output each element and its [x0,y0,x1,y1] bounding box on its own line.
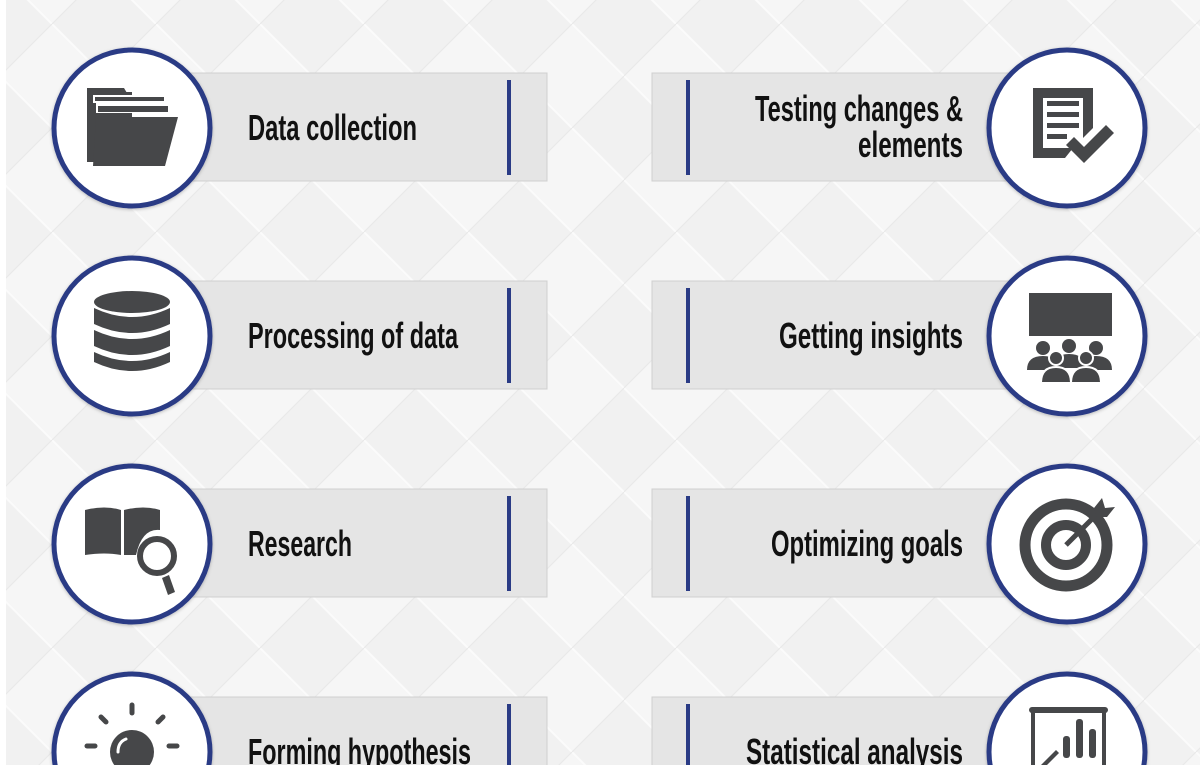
icon: folder [87,88,178,166]
step: Testing changes & elements: Testing changes & [755,88,963,129]
step: Data collection: Data collection [248,107,417,148]
icon: book and magnifier [85,508,175,595]
step: Optimizing goals [652,466,1145,622]
step: Processing of data: Processing of data [248,315,459,356]
step: Testing changes & elements: elements [858,124,963,165]
step: Research [54,466,547,622]
step: Getting insights [652,258,1145,414]
step: Optimizing goals: Optimizing goals [771,523,963,564]
icon: presentation chart [1029,707,1108,765]
step: Data collection [54,50,547,206]
step: Testing changes & elements [652,50,1145,206]
icon: target [1025,498,1115,586]
icon: audience with screen [1027,293,1112,383]
step: Research: Research [248,523,352,564]
step: Getting insights: Getting insights [779,315,963,356]
step: Statistical analysis [652,674,1145,765]
icon: light bulb [87,705,177,765]
step: Forming hypothesis [54,674,547,765]
step: Processing of data [54,258,547,414]
icon: database [94,291,170,371]
icon: document with check [1033,88,1114,163]
